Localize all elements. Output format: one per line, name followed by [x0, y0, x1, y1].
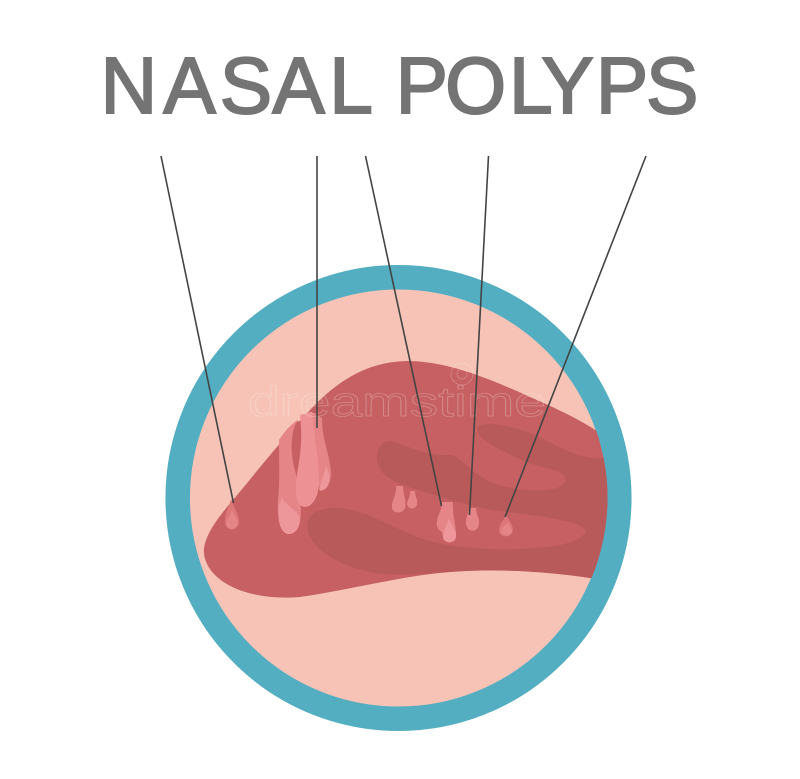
leader lines — [161, 156, 646, 517]
turbinate base — [204, 361, 612, 598]
inner cavity background — [190, 289, 608, 707]
leader line 5 — [505, 156, 646, 517]
darker mucosa folds — [307, 424, 612, 580]
leader line 1 — [161, 156, 234, 503]
leader line 2 — [316, 156, 318, 428]
teal circular frame — [178, 277, 619, 719]
polyp: middle — [466, 508, 479, 531]
polyps: small pair — [392, 486, 417, 512]
watermark: dreamstime — [248, 378, 546, 425]
polyp: far left — [225, 499, 239, 529]
watermark — [248, 363, 546, 425]
polyp: double — [437, 502, 456, 542]
diagram: nasal cavity — [161, 156, 646, 719]
polyp: large cluster — [278, 412, 331, 534]
infographic — [106, 56, 696, 731]
leader line 3 — [366, 156, 442, 506]
polyp: right — [499, 515, 513, 536]
nasal tissue — [204, 361, 612, 598]
title: NASAL POLYPS — [100, 40, 698, 130]
leader line 4 — [470, 156, 488, 515]
